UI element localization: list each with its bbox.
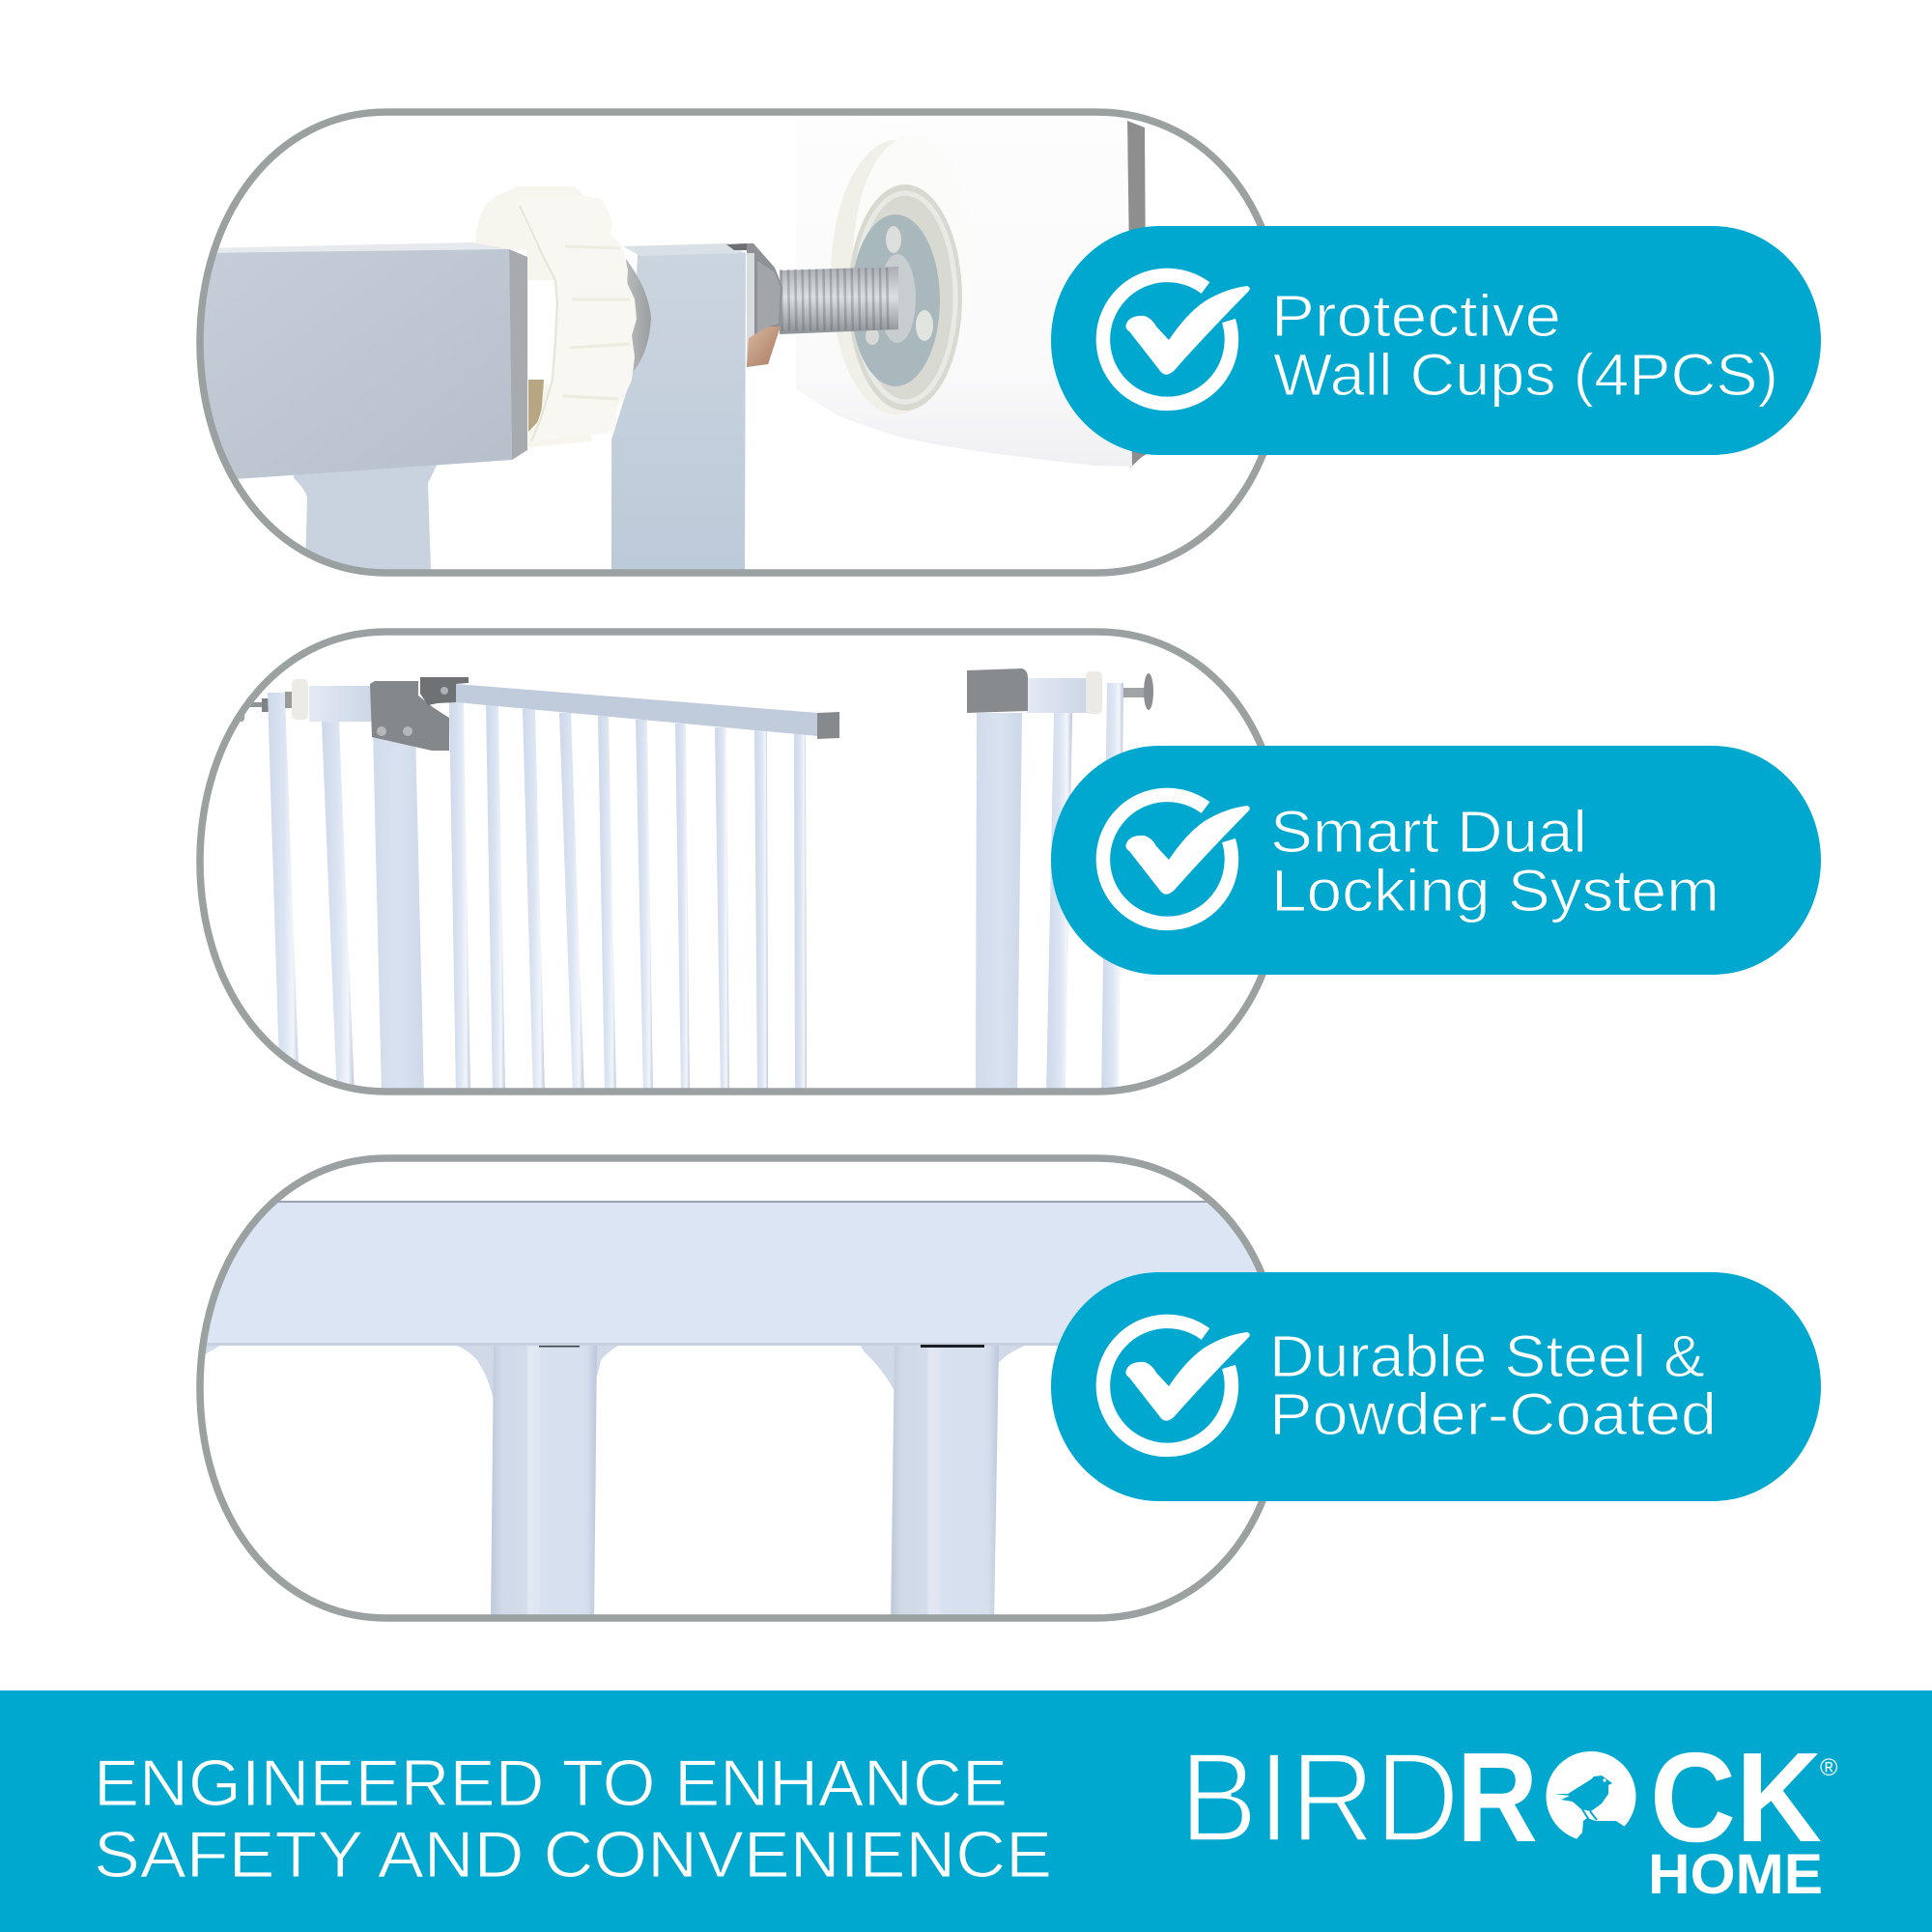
panel outline <box>200 632 1283 1092</box>
callout: protective wall cups <box>1051 226 1821 455</box>
top rail <box>193 1201 1285 1358</box>
photo: gate tension bolt and wall cup <box>193 116 1147 570</box>
tagline: SAFETY AND CONVENIENCE <box>94 1818 1052 1891</box>
post two <box>859 1343 1025 1623</box>
logo: BirdRock Home: CK <box>1650 1726 1822 1868</box>
text <box>1270 799 1719 923</box>
panel: dual locking system photo <box>200 632 1283 1096</box>
wall cup plate <box>796 116 1147 468</box>
door top rail <box>456 684 818 736</box>
latch cap <box>967 668 1028 713</box>
callout: smart dual locking system <box>1051 746 1821 975</box>
weld gaps <box>539 1345 984 1348</box>
tagline <box>94 1747 1052 1891</box>
door bars <box>449 702 807 1096</box>
white adjustment knob <box>520 198 635 441</box>
left knob <box>285 679 308 720</box>
left bolt <box>239 698 269 722</box>
photo: rail and posts close-up <box>193 1201 1285 1623</box>
text: Protective <box>1271 283 1561 349</box>
post one <box>457 1343 618 1623</box>
text: Powder-Coated <box>1269 1381 1717 1447</box>
text: Locking System <box>1271 858 1719 923</box>
panel outline <box>200 112 1283 573</box>
rear nut <box>626 259 651 372</box>
right outer rod <box>1101 683 1123 1096</box>
left horizontal frame <box>309 686 373 722</box>
knob back ring <box>476 186 591 447</box>
threaded bolt <box>780 267 898 334</box>
clear cup disc <box>848 185 962 411</box>
vertical post <box>611 243 746 570</box>
logo: BirdRock Home: R <box>1457 1726 1538 1868</box>
panel: durable steel photo <box>193 1158 1285 1623</box>
hinge bracket <box>370 681 449 751</box>
icon: check mark <box>1103 1321 1250 1450</box>
tagline: ENGINEERED TO ENHANCE <box>94 1747 1008 1820</box>
right knob <box>1086 671 1102 714</box>
rail end cap <box>817 712 839 739</box>
callout: durable steel and powder-coated <box>1051 1272 1821 1501</box>
panel outline <box>200 1158 1283 1618</box>
right post <box>976 713 1022 1096</box>
left post <box>373 729 424 1096</box>
hex nut <box>726 243 782 367</box>
text <box>1269 1323 1717 1447</box>
icon: moon with bird on rock <box>1546 1751 1647 1850</box>
logo: BirdRock Home: HOME <box>1648 1843 1823 1906</box>
right horizontal frame <box>1027 678 1088 713</box>
left outer rod <box>268 693 298 1063</box>
logo: BirdRock Home: O <box>1549 1731 1633 1862</box>
wall cup recess <box>831 140 914 414</box>
logo: BirdRock Home: ® <box>1820 1754 1838 1781</box>
right bolt <box>1123 673 1153 710</box>
latch block <box>420 677 469 705</box>
right rod <box>1046 713 1072 1096</box>
logo: BirdRock Home: BIRD <box>1179 1726 1460 1868</box>
text: Durable Steel & <box>1269 1323 1705 1389</box>
pill background <box>1051 1272 1821 1501</box>
icon: check mark <box>1103 795 1250 923</box>
left inner rod <box>322 722 355 1096</box>
text <box>1271 283 1778 408</box>
icon: check mark <box>1103 275 1250 404</box>
square top tube <box>193 242 527 482</box>
pill background <box>1051 226 1821 455</box>
photo: gate door and frame <box>239 668 1153 1096</box>
text: Smart Dual <box>1270 799 1587 865</box>
footer band <box>0 1690 1932 1932</box>
logo: BirdRock Home <box>1179 1726 1838 1906</box>
text: Wall Cups (4PCS) <box>1273 342 1778 408</box>
knob interior <box>528 280 555 432</box>
pill background <box>1051 746 1821 975</box>
lower round post <box>294 466 437 570</box>
panel: protective wall cups photo <box>193 112 1283 573</box>
